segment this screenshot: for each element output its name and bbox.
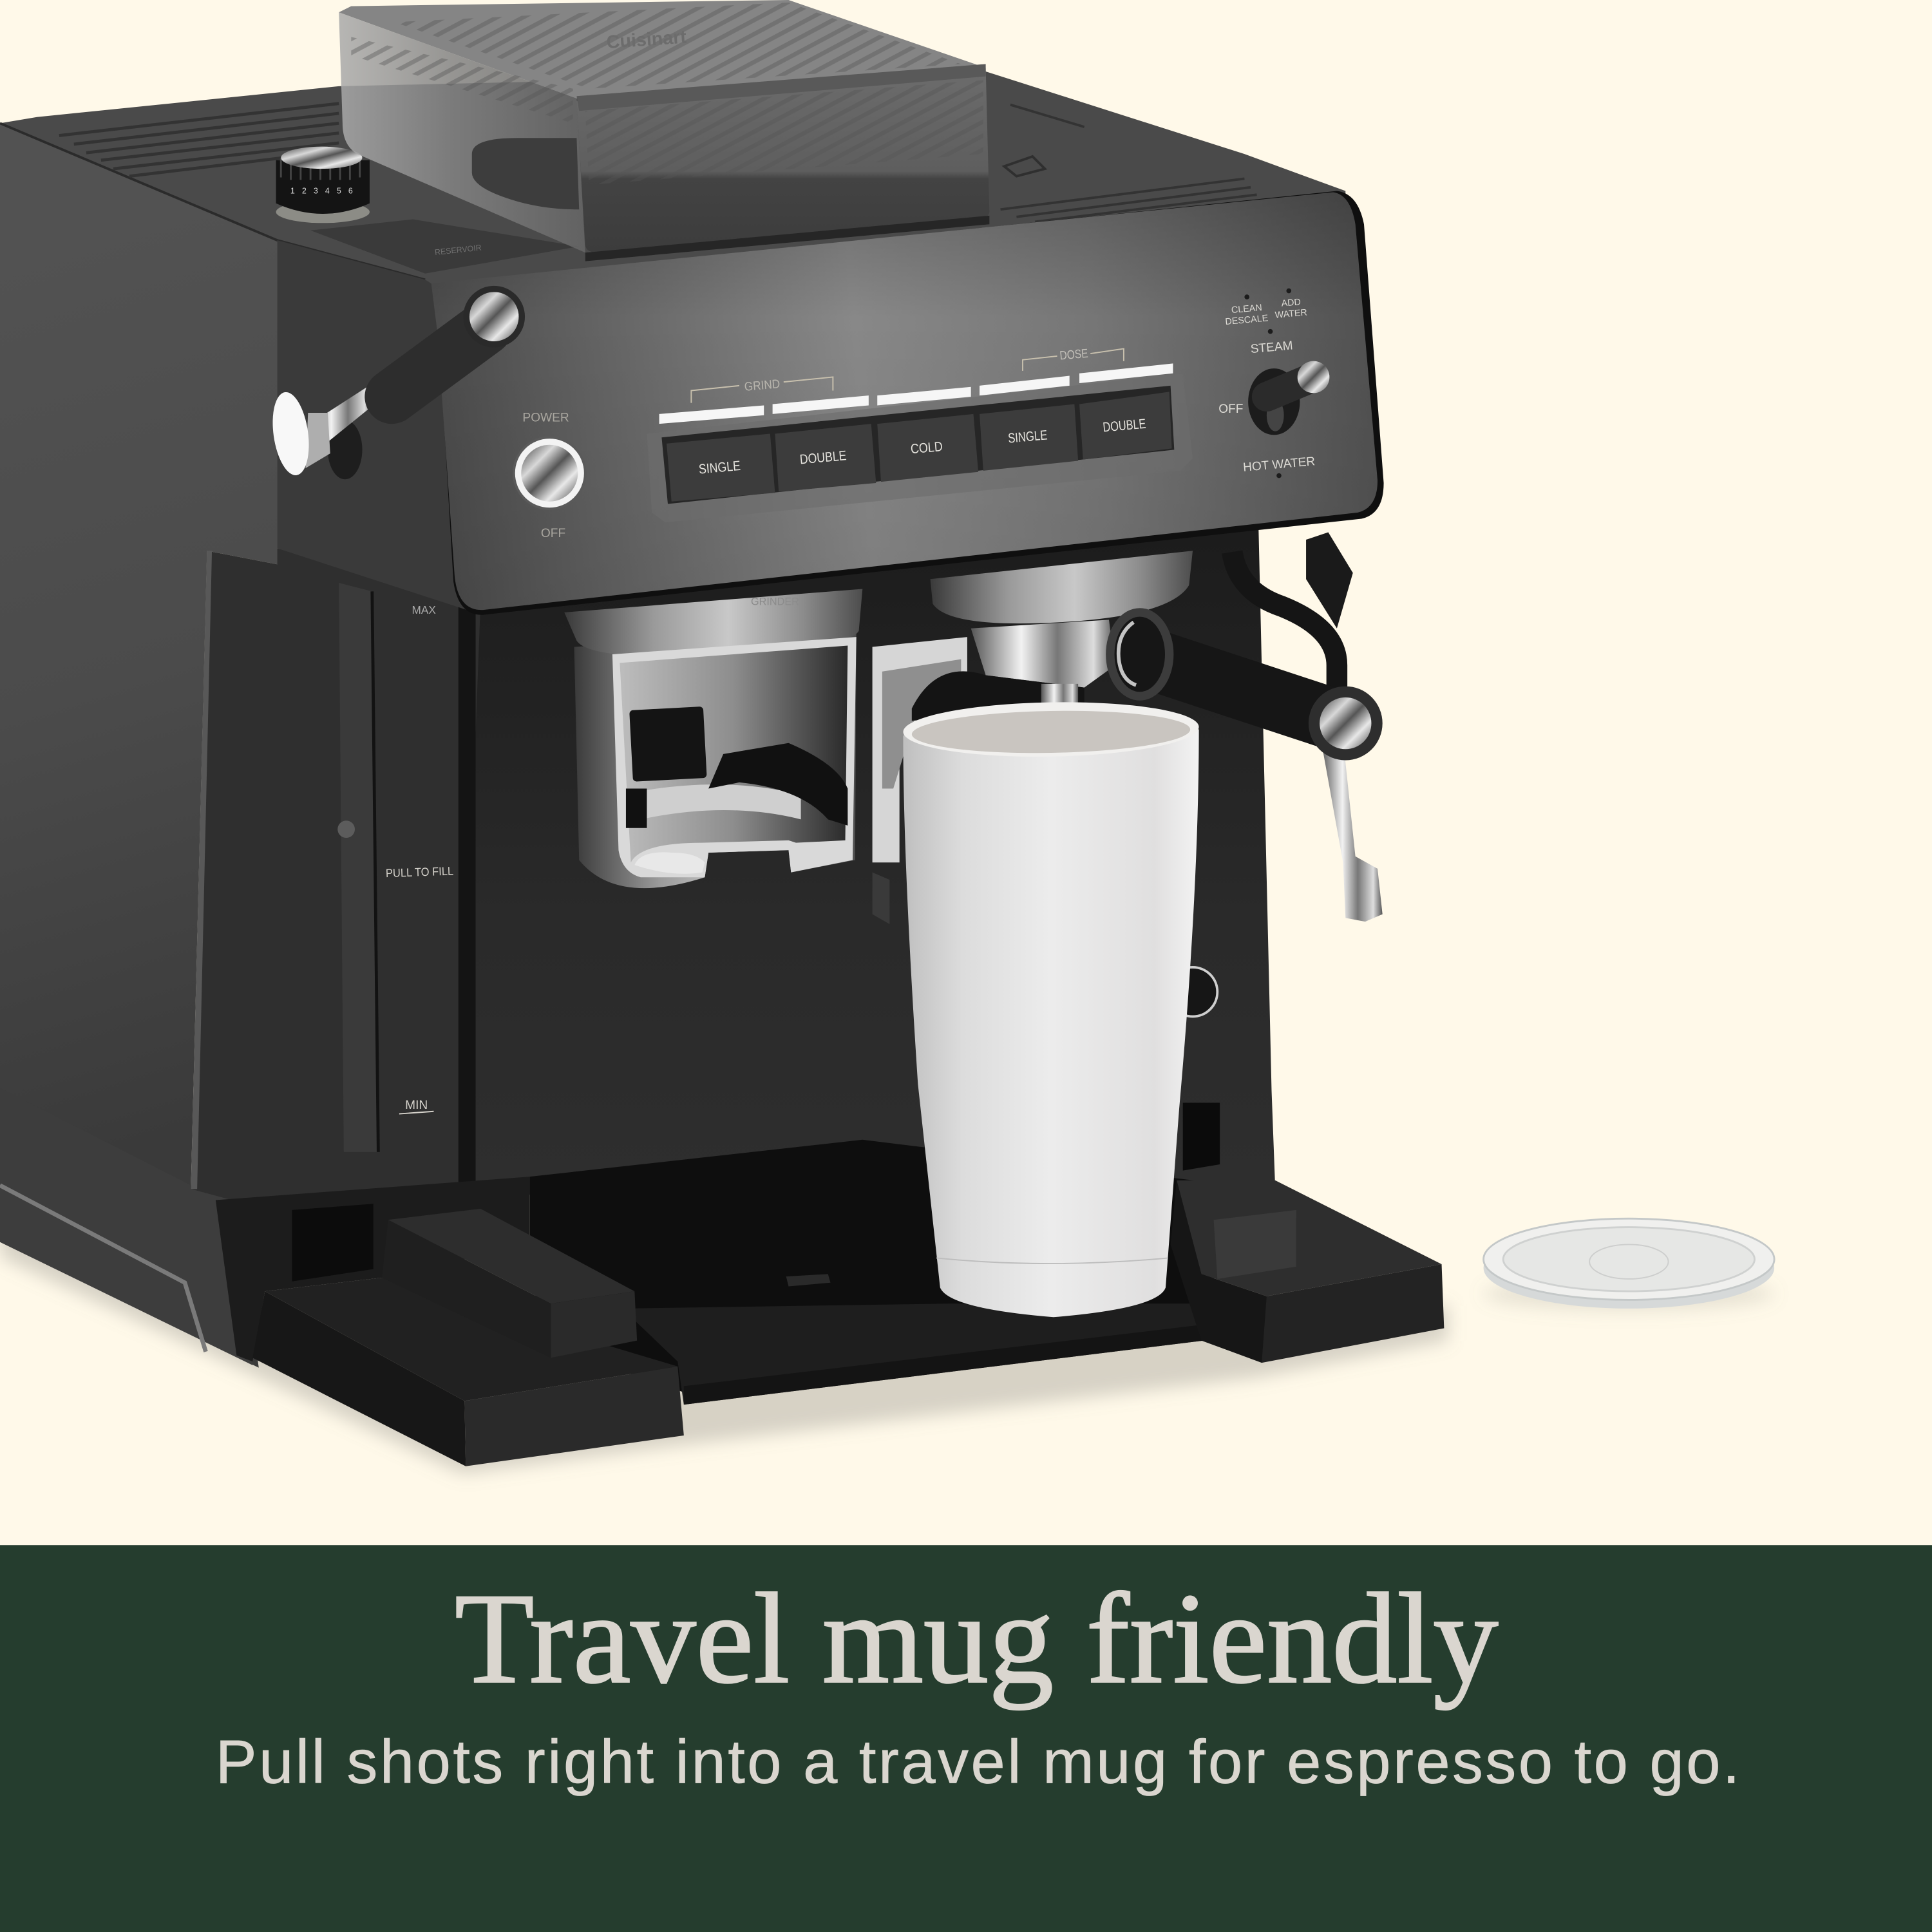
- central back wall: [462, 505, 1275, 1195]
- button labels: DOUBLE: [1103, 417, 1146, 435]
- status labels: CLEAN: [1231, 303, 1262, 316]
- bean hopper: [339, 0, 989, 261]
- floor shadow: [0, 1208, 1774, 1473]
- button recess: [647, 374, 1193, 522]
- title: Travel mug friendly: [455, 1567, 1499, 1710]
- status labels: [1225, 289, 1307, 478]
- label: pull to fill: PULL TO FILL: [386, 864, 453, 880]
- selector off label: OFF: [1218, 402, 1243, 416]
- tamp lever: [268, 286, 525, 479]
- power button: [513, 436, 587, 510]
- drip tray surface: [622, 1274, 1204, 1405]
- button labels: SINGLE: [698, 459, 741, 477]
- hot water label: HOT WATER: [1242, 455, 1316, 475]
- button row: [661, 386, 1174, 504]
- right foot: [1171, 1103, 1444, 1363]
- label: reservoir: RESERVOIR: [434, 243, 482, 257]
- dose bracket: DOSE: [1059, 347, 1088, 363]
- label: min: [399, 1099, 433, 1114]
- label: min: MIN: [405, 1099, 428, 1112]
- off label: OFF: [541, 527, 565, 540]
- status labels: ADD: [1281, 297, 1302, 309]
- travel mug lid: [1484, 1218, 1774, 1309]
- steam label: STEAM: [1250, 339, 1293, 356]
- label: max: MAX: [412, 603, 436, 616]
- group head and portafilter: [873, 551, 1193, 924]
- button labels: [698, 417, 1146, 477]
- grinder outlet: [564, 589, 862, 888]
- espresso machine: [0, 0, 1444, 1466]
- grind bracket: [691, 377, 833, 403]
- button labels: COLD: [910, 439, 943, 457]
- power label: POWER: [522, 411, 569, 424]
- base block and recess: [216, 1177, 530, 1361]
- side panel: [277, 240, 475, 612]
- dial numbers: 1 2 3 4 5 6: [290, 186, 355, 195]
- indicator bars: [659, 363, 1173, 424]
- reservoir plate: [310, 220, 579, 274]
- control panel: [431, 191, 1384, 615]
- steam wand: [1110, 533, 1383, 922]
- travel mug: [903, 700, 1199, 1317]
- water tank: [191, 548, 480, 1201]
- body lower band: [0, 1088, 252, 1365]
- button labels: DOUBLE: [799, 448, 847, 467]
- left foot: [252, 1209, 684, 1466]
- dose bracket: [1023, 347, 1124, 371]
- caption band: [0, 1545, 1932, 1932]
- selector knob: [1248, 361, 1329, 435]
- drip tray floor: [530, 1140, 1214, 1392]
- subtitle: Pull shots right into a travel mug for espresso to go.: [216, 1727, 1740, 1796]
- hopper brand: Cuisinart: [606, 26, 687, 53]
- machine side body: [0, 123, 277, 1368]
- pressure gauge: [1168, 967, 1217, 1016]
- button labels: SINGLE: [1007, 428, 1048, 446]
- label: grinder: GRINDER: [751, 596, 799, 607]
- grind dial: [276, 147, 370, 223]
- status labels: DESCALE: [1225, 313, 1269, 327]
- status labels: WATER: [1274, 308, 1307, 321]
- grind bracket: GRIND: [744, 377, 781, 394]
- top plate: [0, 71, 1345, 302]
